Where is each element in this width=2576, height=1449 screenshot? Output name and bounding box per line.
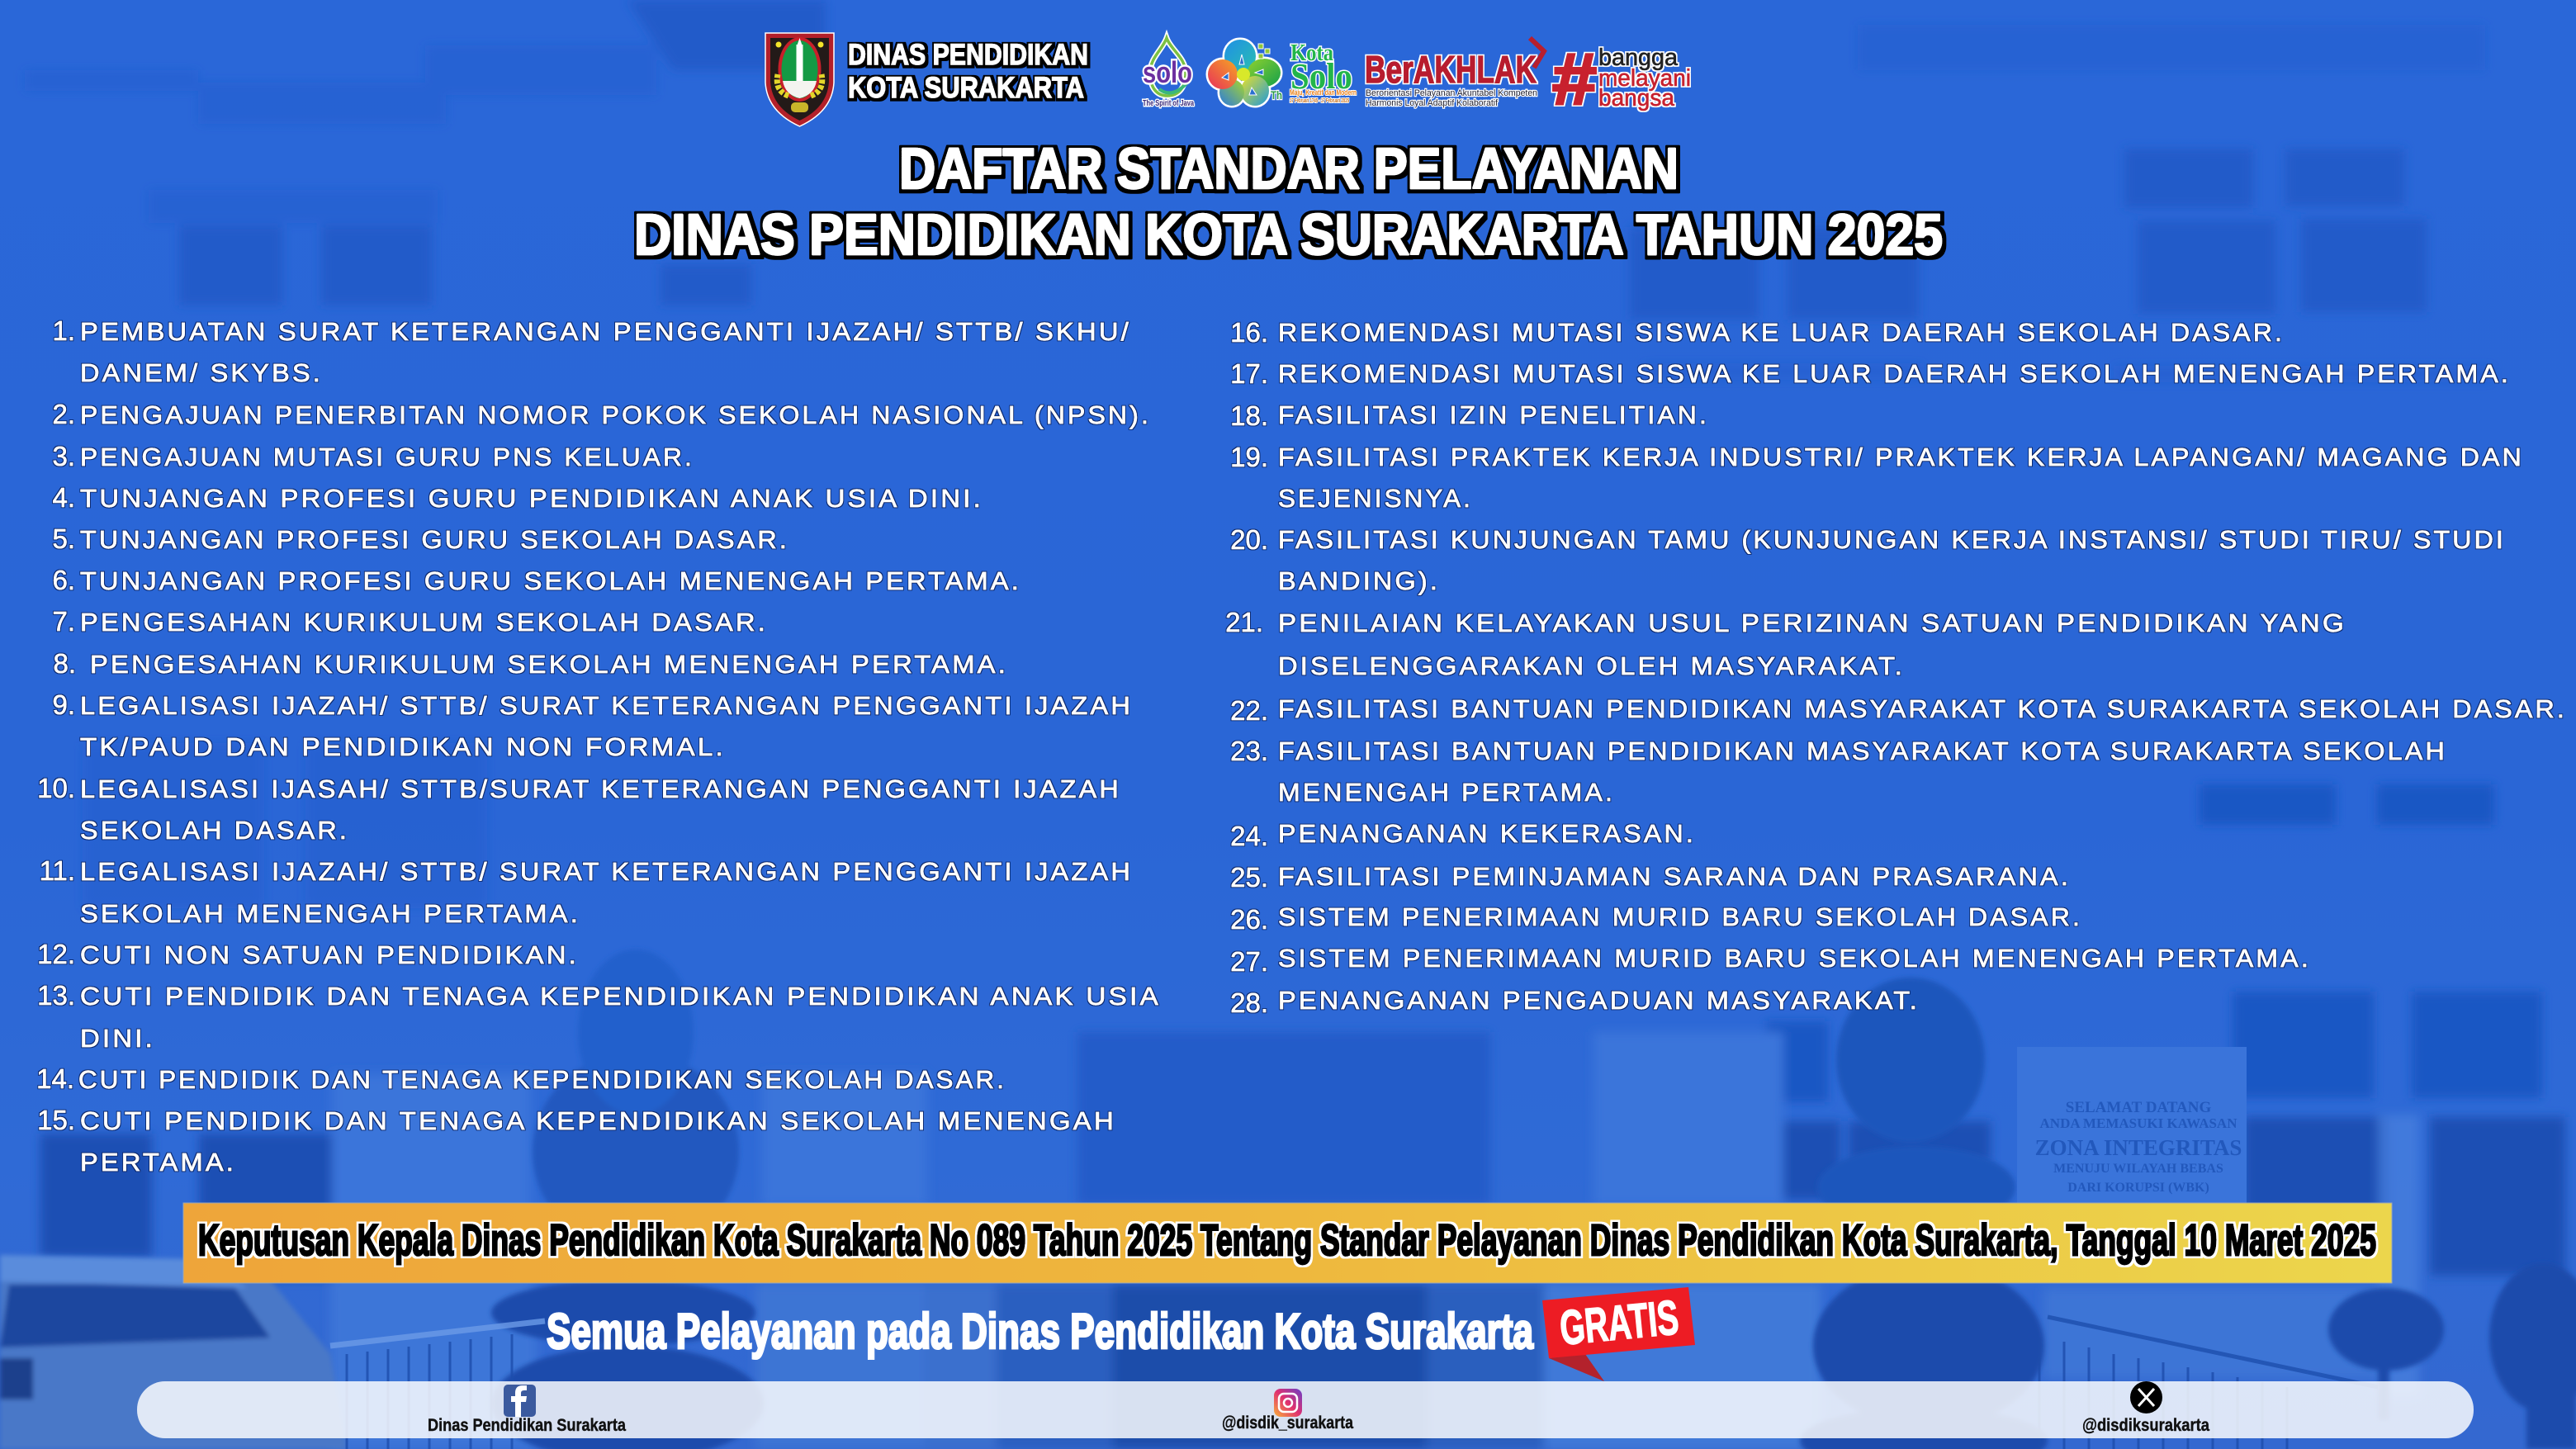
item 24: 24.	[1230, 821, 1268, 851]
Kota Solo text logo: 17 Februari 1745 - 17 Februari 2025	[1290, 98, 1349, 104]
item 4: TUNJANGAN PROFESI GURU PENDIDIKAN ANAK USIA DINI.	[80, 485, 983, 513]
item 27: 27.	[1230, 946, 1268, 977]
agency name: DINAS PENDIDIKAN	[848, 39, 1088, 71]
item 25: FASILITASI PEMINJAMAN SARANA DAN PRASARANA.	[1278, 863, 2071, 891]
item 3: PENGAJUAN MUTASI GURU PNS KELUAR.	[80, 443, 694, 471]
item 22: FASILITASI BANTUAN PENDIDIKAN MASYARAKAT KOTA SURAKARTA SEKOLAH DASAR.	[1278, 695, 2567, 723]
item 19: 19.	[1230, 442, 1268, 472]
item 23: 23.	[1230, 736, 1268, 766]
item 19	[1230, 442, 2524, 513]
item 17: REKOMENDASI MUTASI SISWA KE LUAR DAERAH SEKOLAH MENENGAH PERTAMA.	[1278, 360, 2511, 388]
item 15: PERTAMA.	[80, 1148, 236, 1177]
item 2: PENGAJUAN PENERBITAN NOMOR POKOK SEKOLAH NASIONAL (NPSN).	[80, 401, 1151, 429]
item 8: 8.	[53, 648, 76, 679]
instagram: @disdik_surakarta	[1222, 1413, 1353, 1432]
icon: anniversary flower logo	[1208, 40, 1282, 106]
sign: zona integritas banner in photo	[2017, 1047, 2247, 1204]
item 15: CUTI PENDIDIK DAN TENAGA KEPENDIDIKAN SEKOLAH MENENGAH	[80, 1107, 1116, 1135]
item 11: LEGALISASI IJAZAH/ STTB/ SURAT KETERANGAN PENGGANTI IJAZAH	[80, 858, 1133, 886]
free-service statement: Semua Pelayanan pada Dinas Pendidikan Kota Surakarta	[547, 1304, 1533, 1359]
item 28: 28.	[1230, 987, 1268, 1018]
item 8: PENGESAHAN KURIKULUM SEKOLAH MENENGAH PERTAMA.	[90, 651, 1008, 679]
icon: Solo the Spirit of Java logo	[1143, 38, 1194, 108]
item 11	[40, 855, 1133, 928]
item 1	[52, 315, 1131, 387]
item 23	[1230, 736, 2447, 807]
item 25: 25.	[1230, 862, 1268, 893]
item 15: 15.	[37, 1105, 75, 1135]
callout: decree banner	[183, 1203, 2392, 1283]
item 23: MENENGAH PERTAMA.	[1278, 779, 1615, 807]
item 22: 22.	[1230, 695, 1268, 726]
item 24: PENANGANAN KEKERASAN.	[1278, 820, 1696, 848]
item 18: FASILITASI IZIN PENELITIAN.	[1278, 401, 1709, 429]
bangga melayani bangsa logo: #	[1552, 38, 1597, 120]
X	[2082, 1381, 2209, 1435]
callout: GRATIS ribbon	[1542, 1287, 1695, 1381]
panel: service list column 1	[36, 315, 1161, 1177]
item 23: FASILITASI BANTUAN PENDIDIKAN MASYARAKAT KOTA SURAKARTA SEKOLAH	[1278, 737, 2447, 765]
X: @disdiksurakarta	[2082, 1416, 2209, 1435]
sign: zona integritas banner in photo: ZONA INTEGRITAS	[2035, 1135, 2242, 1160]
item 10	[37, 773, 1121, 845]
item 10: SEKOLAH DASAR.	[80, 817, 349, 845]
footer: social media bar	[137, 1381, 2474, 1438]
item 2: 2.	[52, 399, 75, 429]
panel: service list column 2	[1225, 317, 2567, 1018]
title	[634, 136, 1943, 267]
Kota Solo text logo: Kota	[1290, 40, 1333, 66]
sign: zona integritas banner in photo: SELAMAT DATANG	[2066, 1099, 2211, 1116]
BerAKHLAK logo	[1365, 38, 1544, 108]
instagram	[1222, 1389, 1353, 1432]
item 6: TUNJANGAN PROFESI GURU SEKOLAH MENENGAH PERTAMA.	[80, 567, 1021, 595]
icon: Solo the Spirit of Java logo: The Spirit of Java	[1143, 99, 1194, 108]
item 12: CUTI NON SATUAN PENDIDIKAN.	[80, 941, 579, 969]
item 10: 10.	[37, 773, 75, 803]
icon: Solo the Spirit of Java logo: solo	[1143, 55, 1192, 89]
item 5: 5.	[52, 523, 75, 554]
item 11: 11.	[40, 855, 75, 886]
item 21: 21.	[1225, 607, 1263, 637]
bangga melayani bangsa logo	[1552, 38, 1691, 120]
facebook	[428, 1385, 626, 1435]
bangga melayani bangsa logo: bangga	[1598, 45, 1679, 71]
icon: Surakarta crest	[765, 33, 834, 126]
item 7: PENGESAHAN KURIKULUM SEKOLAH DASAR.	[80, 608, 768, 637]
BerAKHLAK logo: BerAKHLAK	[1365, 48, 1537, 91]
item 19: SEJENISNYA.	[1278, 485, 1473, 513]
item 9	[52, 689, 1133, 761]
item 20: FASILITASI KUNJUNGAN TAMU (KUNJUNGAN KERJA INSTANSI/ STUDI TIRU/ STUDI	[1278, 526, 2506, 554]
item 1: DANEM/ SKYBS.	[80, 359, 323, 387]
item 1: PEMBUATAN SURAT KETERANGAN PENGGANTI IJAZAH/ STTB/ SKHU/	[80, 318, 1131, 346]
agency name: KOTA SURAKARTA	[848, 72, 1084, 104]
item 21: PENILAIAN KELAYAKAN USUL PERIZINAN SATUAN PENDIDIKAN YANG	[1278, 609, 2346, 637]
Kota Solo text logo: Solo	[1290, 56, 1352, 97]
item 20	[1230, 524, 2506, 595]
item 9: LEGALISASI IJAZAH/ STTB/ SURAT KETERANGAN PENGGANTI IJAZAH	[80, 692, 1133, 720]
title: DINAS PENDIDIKAN KOTA SURAKARTA TAHUN 2025	[634, 202, 1943, 267]
bangga melayani bangsa logo: melayani	[1598, 65, 1691, 92]
railings in photo	[330, 1317, 2378, 1449]
item 4: 4.	[52, 482, 75, 513]
item 26: 26.	[1230, 904, 1268, 935]
item 20: BANDING).	[1278, 567, 1440, 595]
facebook: Dinas Pendidikan Surakarta	[428, 1416, 626, 1435]
item 19: FASILITASI PRAKTEK KERJA INDUSTRI/ PRAKTEK KERJA LAPANGAN/ MAGANG DAN	[1278, 443, 2524, 471]
sign: zona integritas banner in photo: DARI KORUPSI (WBK)	[2067, 1181, 2209, 1195]
item 1: 1.	[52, 315, 75, 346]
item 13: DINI.	[80, 1025, 155, 1053]
item 10: LEGALISASI IJASAH/ STTB/SURAT KETERANGAN PENGGANTI IJAZAH	[80, 775, 1121, 803]
header: crest and agency name	[765, 33, 1088, 126]
item 5: TUNJANGAN PROFESI GURU SEKOLAH DASAR.	[80, 526, 789, 554]
icon: anniversary flower logo: Th	[1271, 88, 1282, 102]
item 15	[37, 1105, 1116, 1177]
item 11: SEKOLAH MENENGAH PERTAMA.	[80, 900, 580, 928]
BerAKHLAK logo: Berorientasi Pelayanan Akuntabel Kompeten	[1366, 88, 1537, 98]
item 17: 17.	[1230, 358, 1268, 389]
car in photo	[0, 1255, 347, 1449]
item 6: 6.	[52, 565, 75, 595]
item 18: 18.	[1230, 400, 1268, 431]
title: DAFTAR STANDAR PELAYANAN	[899, 136, 1679, 201]
item 14: 14.	[36, 1063, 74, 1094]
item 21: DISELENGGARAKAN OLEH MASYARAKAT.	[1278, 652, 1905, 680]
item 16: REKOMENDASI MUTASI SISWA KE LUAR DAERAH SEKOLAH DASAR.	[1278, 319, 2285, 347]
item 14: CUTI PENDIDIK DAN TENAGA KEPENDIDIKAN SEKOLAH DASAR.	[78, 1066, 1006, 1094]
item 21	[1225, 607, 2346, 680]
sign: zona integritas banner in photo: ANDA MEMASUKI KAWASAN	[2040, 1115, 2237, 1131]
bangga melayani bangsa logo: bangsa	[1598, 85, 1675, 111]
item 9: 9.	[52, 689, 75, 720]
item 3: 3.	[52, 441, 75, 471]
item 27: SISTEM PENERIMAAN MURID BARU SEKOLAH MENENGAH PERTAMA.	[1278, 945, 2311, 973]
item 13	[37, 980, 1161, 1053]
item 9: TK/PAUD DAN PENDIDIKAN NON FORMAL.	[80, 733, 726, 761]
item 26: SISTEM PENERIMAAN MURID BARU SEKOLAH DASAR.	[1278, 903, 2082, 931]
Kota Solo text logo: Maju, Kreatif dan Modern	[1290, 88, 1357, 97]
logos row	[1143, 38, 1691, 120]
item 13: CUTI PENDIDIK DAN TENAGA KEPENDIDIKAN PENDIDIKAN ANAK USIA	[80, 983, 1161, 1011]
item 16: 16.	[1230, 317, 1268, 348]
item 12: 12.	[37, 939, 75, 969]
item 13: 13.	[37, 980, 75, 1011]
item 20: 20.	[1230, 524, 1268, 555]
item 7: 7.	[52, 606, 75, 637]
item 28: PENANGANAN PENGADUAN MASYARAKAT.	[1278, 987, 1920, 1015]
sign: zona integritas banner in photo: MENUJU WILAYAH BEBAS	[2053, 1162, 2223, 1176]
agency name	[848, 39, 1088, 104]
lower strip between banner and footer	[330, 1115, 2419, 1449]
Kota Solo text logo	[1290, 40, 1357, 104]
callout: GRATIS ribbon: GRATIS	[1557, 1290, 1681, 1356]
BerAKHLAK logo: Harmonis Loyal Adaptif Kolaboratif	[1366, 98, 1499, 108]
